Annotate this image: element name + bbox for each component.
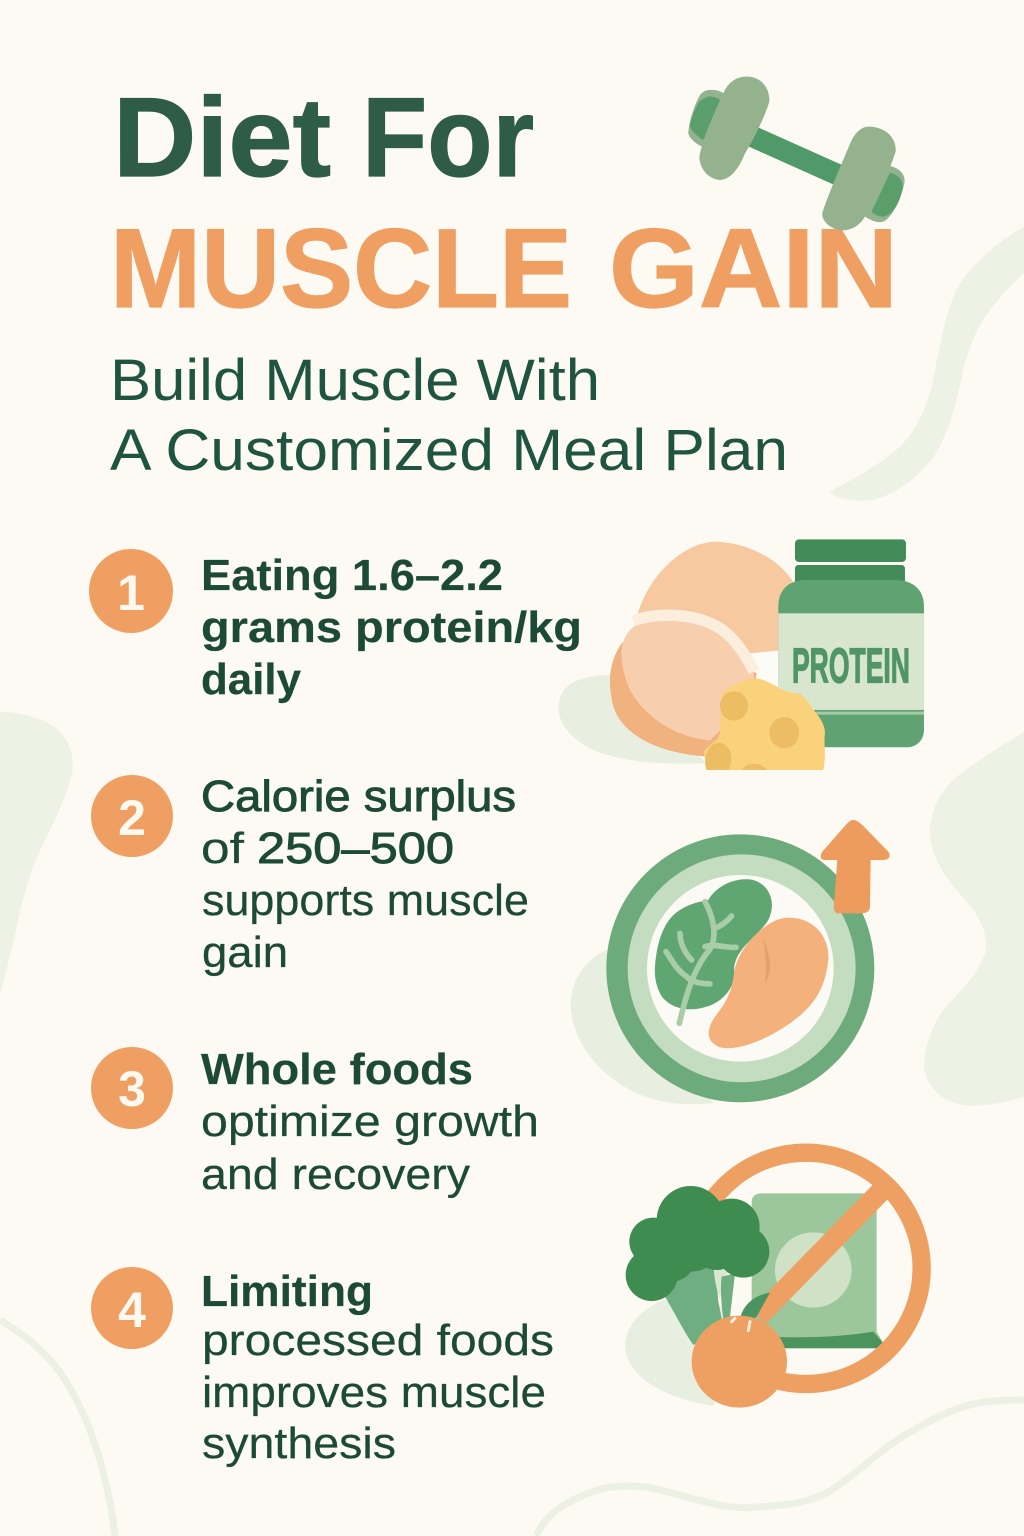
number badge 4 [91,1267,173,1349]
step 2 text: Calorie surplus [201,772,516,821]
step 2 text: supports muscle [202,876,529,925]
spinach leaf [655,879,772,1023]
orange fruit [692,1316,787,1408]
step 1 text [201,551,582,704]
step 4 text: improves muscle [202,1368,546,1417]
step 2 text [201,772,529,977]
step 3 text: Whole foods [201,1045,473,1094]
step 4 text [201,1267,554,1468]
step 4 text: Limiting [201,1267,373,1316]
step 2 text: 250–500 [257,824,454,873]
title line: Diet For: Diet [113,75,331,200]
step 3 text [201,1045,539,1199]
broccoli [626,1186,770,1345]
step 4 text: processed foods [202,1316,554,1365]
step 4 [91,1267,554,1468]
step 3 text: optimize growth [201,1097,539,1146]
title line: Muscle Gain: GAIN [609,206,898,331]
prohibition sign [690,1153,922,1384]
processed food package [752,1193,883,1348]
cheese [704,678,825,770]
step 2 text: of [201,824,245,873]
icon: eggs, cheese and protein jar [558,539,924,770]
subtitle: Build Muscle With [110,348,600,413]
protein label text: PROTEIN [792,638,910,693]
number badge 2: 2 [118,790,146,846]
icon: dumbbell [688,77,905,230]
chicken breast [709,918,828,1048]
icon: no processed foods [625,1153,922,1408]
title line: Muscle Gain [110,206,898,331]
step 1 text: daily [201,655,302,704]
step 2 text: gain [202,928,288,977]
subtitle: A Customized Meal Plan [110,418,788,483]
number badge 3 [91,1047,173,1129]
number badge 4: 4 [118,1282,146,1338]
title line: Diet For [113,75,534,200]
icon: plate with spinach and chicken [571,820,890,1104]
number badge 1: 1 [117,565,145,621]
step 1 text: grams protein/kg [201,603,582,652]
step 3 text: and recovery [201,1150,470,1199]
subtitle [110,348,788,483]
number badge 1 [89,549,173,633]
number badge 3: 3 [118,1061,146,1117]
step 3 [91,1045,539,1199]
title [110,75,898,331]
number badge 2 [91,775,173,857]
arrow up [821,820,890,913]
step 4 text: synthesis [202,1419,396,1468]
title line: Muscle Gain: MUSCLE [110,206,572,331]
title line: Diet For: For [362,75,534,200]
step 1 [89,549,582,704]
step 1 text: Eating 1.6–2.2 [201,551,503,600]
step 2 [91,772,529,977]
